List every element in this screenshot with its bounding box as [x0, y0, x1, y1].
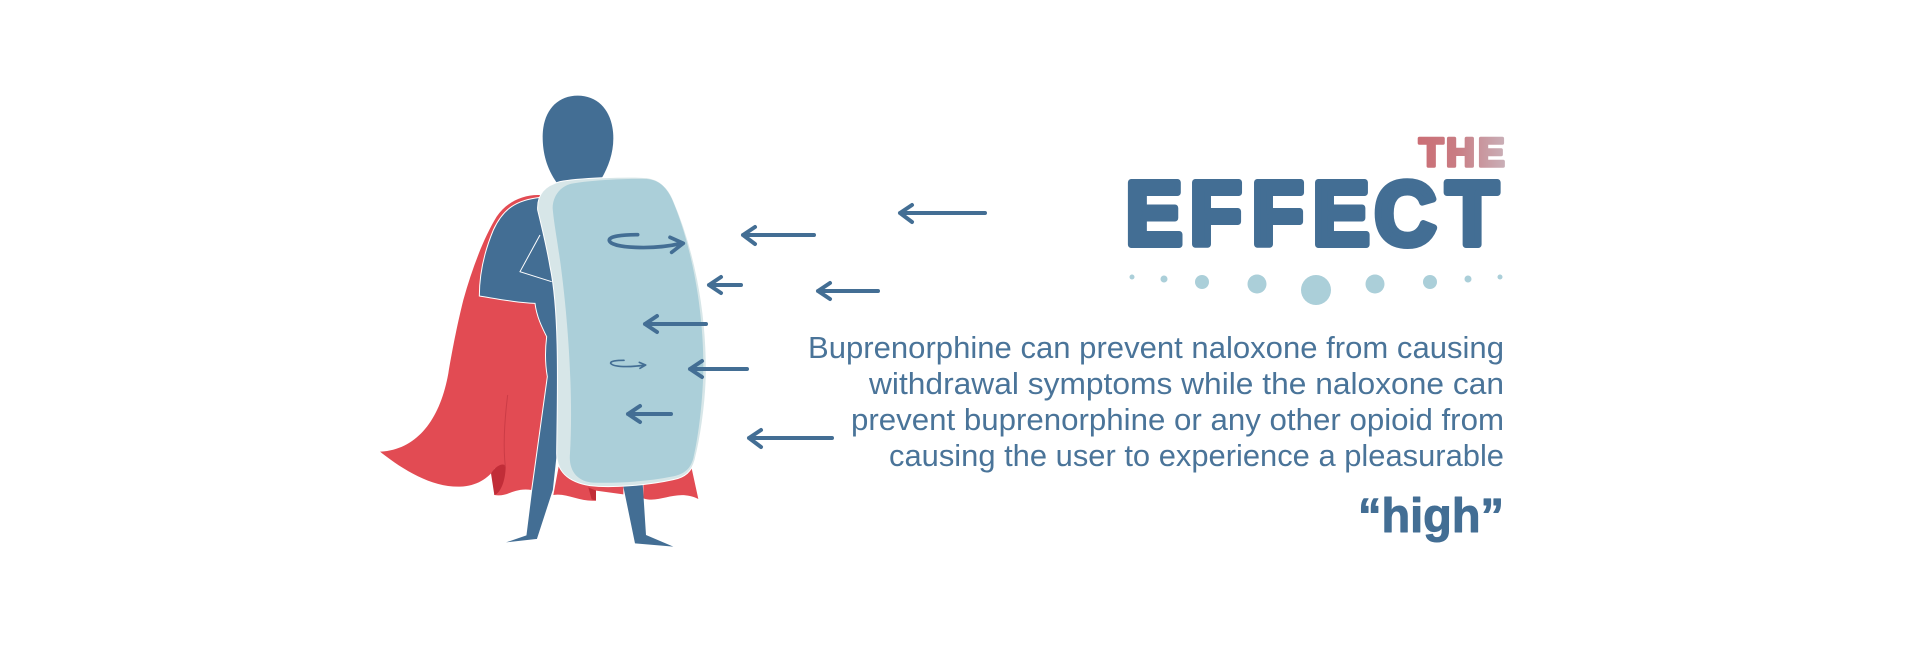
- illustration: superhero with shield: [380, 96, 706, 547]
- figure: right leg: [623, 483, 673, 547]
- arrow 2: [743, 227, 814, 244]
- body text: withdrawal symptoms while the naloxone can: [868, 366, 1504, 401]
- shield: [538, 177, 706, 487]
- red cape: [380, 195, 698, 501]
- arrow 5: [645, 316, 706, 332]
- arrow 4: [818, 283, 878, 299]
- heading: EFFECT: EFFECT: [1126, 164, 1498, 264]
- figure: arm outline: [520, 235, 552, 282]
- curved arrow: small: [611, 360, 646, 368]
- heading: THE: THE: [1419, 131, 1505, 175]
- dots row: [1130, 274, 1502, 305]
- arrows: [628, 205, 985, 447]
- arrow 3: [709, 277, 741, 293]
- body text: causing the user to experience a pleasurable: [889, 438, 1504, 473]
- figure: torso and left leg: [479, 197, 562, 543]
- body text: Buprenorphine can prevent naloxone from causing: [808, 330, 1504, 365]
- figure: head: [543, 96, 613, 183]
- body text: [808, 330, 1504, 473]
- arrow 1: [900, 205, 985, 222]
- body text: prevent buprenorphine or any other opioid from: [851, 402, 1504, 437]
- cape fold shadows: [491, 395, 596, 501]
- arrow 8: [749, 430, 832, 447]
- arrow 6: [690, 361, 747, 377]
- emphasis: high: “high”: [1358, 490, 1504, 543]
- curved arrow: large: [609, 235, 683, 252]
- arrow 7: [628, 406, 671, 422]
